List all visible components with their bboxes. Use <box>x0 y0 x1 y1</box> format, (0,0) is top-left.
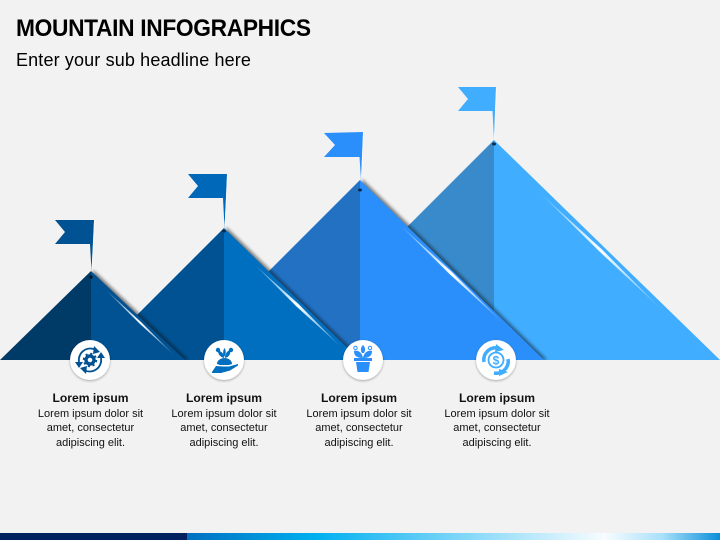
caption 2: Lorem ipsum dolor sit <box>171 408 277 420</box>
title: MOUNTAIN INFOGRAPHICS <box>16 15 311 42</box>
caption 1: Lorem ipsum dolor sit <box>38 408 143 420</box>
caption 1 <box>38 391 143 449</box>
caption 1: Lorem ipsum <box>53 391 128 405</box>
caption 4: Lorem ipsum dolor sit <box>444 408 550 420</box>
caption 2: Lorem ipsum <box>186 391 262 405</box>
caption 2: amet, consectetur <box>180 422 268 434</box>
mountain 2 <box>137 174 350 360</box>
caption 3: amet, consectetur <box>315 422 403 434</box>
mountain 4 <box>274 87 720 360</box>
mountain 1 <box>0 220 188 360</box>
icon badge 1: gear cycle <box>70 340 110 381</box>
caption 1: amet, consectetur <box>47 422 134 434</box>
caption 3: Lorem ipsum <box>321 391 397 405</box>
caption 4: amet, consectetur <box>453 422 541 434</box>
caption 2 <box>171 391 277 449</box>
footer bar <box>0 533 720 540</box>
flag 3 <box>324 132 364 180</box>
mountain chart <box>0 87 720 382</box>
caption 3: adipiscing elit. <box>324 437 394 449</box>
caption 1: adipiscing elit. <box>56 437 125 449</box>
flag 2 <box>188 174 228 228</box>
caption 4: adipiscing elit. <box>462 437 532 449</box>
icon badge 4: dollar cycle: $ <box>493 354 500 368</box>
mountain 3 <box>268 132 548 360</box>
flag 1 <box>55 220 94 271</box>
icon badge 4: dollar cycle <box>476 340 516 381</box>
flag 4 <box>458 87 496 140</box>
icon badge 2: hand with plant <box>204 340 244 381</box>
subtitle: Enter your sub headline here <box>16 50 251 70</box>
caption 2: adipiscing elit. <box>189 437 259 449</box>
caption 3: Lorem ipsum dolor sit <box>306 408 412 420</box>
caption 4: Lorem ipsum <box>459 391 535 405</box>
caption 4 <box>444 391 550 449</box>
caption 3 <box>306 391 412 449</box>
icon badge 3: potted plant <box>343 340 383 381</box>
